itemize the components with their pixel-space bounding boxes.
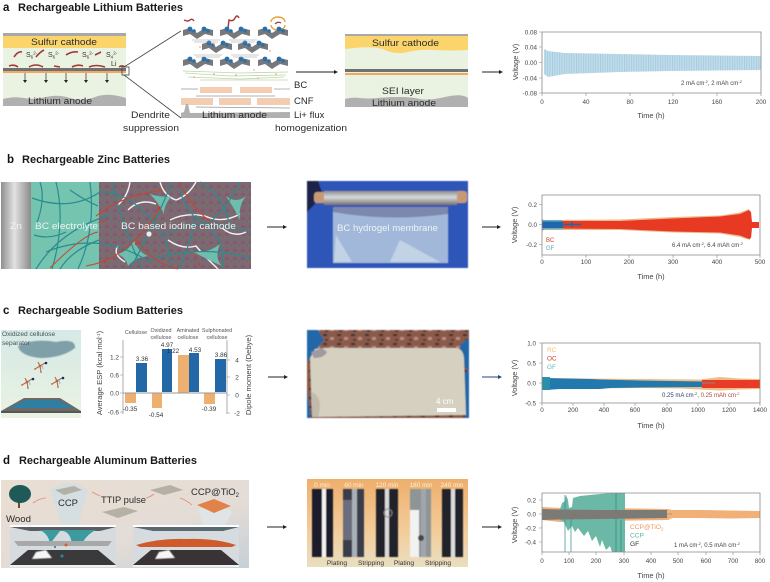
chart d <box>510 493 766 580</box>
arrow a1 <box>296 70 338 74</box>
bar chart: ESP and dipole moment: -0.6 <box>108 410 119 416</box>
diagram: dendrite cell: 2- <box>33 50 38 56</box>
chart d: Voltage (V) <box>510 507 519 543</box>
arrow d1 <box>267 525 287 529</box>
bar chart: ESP and dipole moment: cellulose <box>207 335 227 341</box>
scene right <box>133 525 239 567</box>
chart c: 0.0 <box>527 380 536 388</box>
photo series: plating and stripping: 60 min <box>344 482 364 489</box>
chart b: 0.2 <box>528 202 537 209</box>
chart a: , 2 mAh cm <box>708 81 738 87</box>
bar chart: ESP and dipole moment <box>95 328 253 419</box>
label: dendrite suppression: suppression <box>123 123 179 134</box>
diagram: dendrite cell: Sulfur cathode <box>31 37 97 48</box>
chart a: 0.04 <box>525 44 537 52</box>
panel: c rechargeable sodium batteries <box>1 305 767 430</box>
chart b: 400 <box>712 259 723 266</box>
chart a: 0.00 <box>525 60 537 67</box>
photo series: plating and stripping: Plating <box>327 560 347 567</box>
bar chart: ESP and dipole moment: 1.22 <box>167 348 180 355</box>
panel: b rechargeable zinc batteries <box>1 154 766 281</box>
diagram: wood CCP TiO2 process: Wood <box>6 514 31 525</box>
chart d: 500 <box>673 558 684 565</box>
arrow d2 <box>482 525 502 529</box>
bar chart: ESP and dipole moment: Average ESP (kcal mol <box>95 337 104 415</box>
bar chart: ESP and dipole moment: -2 <box>234 410 240 418</box>
chart d: -0.2 <box>525 526 536 532</box>
bar chart: ESP and dipole moment: -0.39 <box>202 406 217 413</box>
diagram: zinc iodine cell: Zn <box>10 221 22 232</box>
diagram: stabilised cell: Sulfur cathode <box>372 38 439 49</box>
chart a: 160 <box>712 99 723 106</box>
label c: c <box>3 305 10 317</box>
diagram: stabilised cell: SEI layer <box>382 86 424 97</box>
chart d: -0.4 <box>525 540 536 546</box>
label b: b <box>7 154 14 166</box>
bar chart: ESP and dipole moment: Cellulose <box>125 330 147 336</box>
chart a: Voltage (V) <box>511 44 520 80</box>
chart c: Voltage (V) <box>510 360 519 396</box>
bar chart: ESP and dipole moment: 3.86 <box>215 352 228 359</box>
diagram: BC CNF layered separator: Lithium anode <box>202 110 267 121</box>
chart d: CCP@TiO <box>630 524 661 531</box>
bar chart: ESP and dipole moment: 4.97 <box>161 342 174 349</box>
bar chart: ESP and dipole moment: cellulose <box>151 335 171 341</box>
diagram: wood CCP TiO2 process: CCP@TiO <box>191 487 236 498</box>
chart d: 800 <box>755 558 766 565</box>
label d: d <box>3 455 10 467</box>
chart b: -2 <box>700 241 705 246</box>
chart c: -2 <box>736 391 740 396</box>
diagram: wood CCP TiO2 process: TTIP pulse <box>101 495 146 506</box>
diagram: stabilised cell <box>345 34 468 109</box>
chart c: Time (h) <box>637 421 665 430</box>
bar chart: ESP and dipole moment: cellulose <box>178 335 198 341</box>
chart c: 600 <box>630 407 641 414</box>
diagram: stabilised cell: Lithium anode <box>372 98 436 109</box>
chart c: 1200 <box>722 407 736 414</box>
chart b: 300 <box>668 259 679 266</box>
bar chart: ESP and dipole moment: -0.35 <box>123 406 138 413</box>
diagram: dendrite cell: Lithium anode <box>28 96 92 107</box>
chart c: -2 <box>694 391 698 396</box>
diagram: dendrite cell: Li <box>111 61 117 68</box>
chart a: -0.08 <box>523 90 537 98</box>
diagram: wood CCP TiO2 process <box>1 480 249 568</box>
bar chart: ESP and dipole moment: 2 <box>235 374 239 382</box>
diagram: dendrite cell: 6 <box>53 54 56 60</box>
chart d: CCP <box>630 532 645 540</box>
diagram: dendrite cell: S <box>82 52 87 59</box>
diagram: wood CCP TiO2 process: CCP <box>58 498 78 509</box>
chart a <box>511 30 767 120</box>
photo series: plating and stripping: 0 min <box>314 482 330 489</box>
chart b: , 6.4 mAh cm <box>704 243 739 249</box>
label: dendrite suppression <box>123 110 179 134</box>
chart c: , <box>697 393 701 399</box>
chart d: 2 <box>661 526 664 532</box>
chart a: -2 <box>738 79 743 84</box>
chart b: 0 <box>540 259 544 266</box>
chart b: Time (h) <box>637 272 665 281</box>
diagram: dendrite cell: S <box>48 52 53 59</box>
chart d: 300 <box>619 558 630 565</box>
diagram: dendrite cell: 2- <box>89 50 94 56</box>
chart d: 100 <box>564 558 575 565</box>
diagram: dendrite cell: S <box>26 52 31 59</box>
chart a: -2 <box>704 79 709 84</box>
chart a: 2 mA cm <box>681 81 704 87</box>
chart a: 40 <box>582 99 590 106</box>
heading c: Rechargeable Sodium Batteries <box>18 305 183 317</box>
chart a: 200 <box>756 99 767 106</box>
labels: separator layers: homogenization <box>275 123 347 134</box>
chart d: 0.0 <box>527 512 536 518</box>
diagram: dendrite cell: 6 <box>31 54 34 60</box>
bar chart: ESP and dipole moment: 3.36 <box>136 356 149 363</box>
bar chart: ESP and dipole moment: -0.54 <box>149 412 164 419</box>
chart b: 6.4 mA cm <box>672 243 700 249</box>
chart b: Voltage (V) <box>510 207 519 243</box>
chart c: 0.5 <box>527 360 536 368</box>
chart c: 1.0 <box>527 340 536 348</box>
chart c: 800 <box>662 407 673 414</box>
diagram: dendrite cell: 6 <box>87 54 90 60</box>
heading d: Rechargeable Aluminum Batteries <box>19 455 197 467</box>
photo series: plating and stripping: Stripping <box>425 560 451 567</box>
photo: BC hydrogel membrane <box>307 181 468 268</box>
chart a: 0.08 <box>525 30 537 36</box>
labels: separator layers <box>275 80 347 134</box>
photo series: plating and stripping: 120 min <box>376 482 399 489</box>
chart d: -2 <box>697 541 702 546</box>
zoom indicator <box>122 31 181 118</box>
diagram: zinc iodine cell <box>1 182 251 269</box>
chart c: 1400 <box>753 407 767 414</box>
chart c: RC <box>547 347 557 354</box>
chart a: 0 <box>540 99 544 106</box>
diagram: wood CCP TiO2 process: 2 <box>236 493 240 499</box>
chart c <box>510 340 767 430</box>
chart b: BC <box>546 238 555 244</box>
diagram: zinc iodine cell: BC based iodine cathode <box>121 221 236 232</box>
scene left <box>10 525 116 567</box>
chart b: 200 <box>624 259 635 266</box>
chart a: 120 <box>668 99 679 106</box>
chart d: 600 <box>701 558 712 565</box>
chart b: -2 <box>739 241 744 246</box>
labels: separator layers: BC <box>294 80 307 91</box>
chart a: -0.04 <box>523 76 537 82</box>
bar chart: ESP and dipole moment: 0 <box>235 392 239 400</box>
bar chart: ESP and dipole moment: Aminated <box>177 328 199 334</box>
diagram: dendrite cell: 2- <box>113 50 118 56</box>
bar chart: ESP and dipole moment: 0.6 <box>110 372 119 380</box>
chart b: 100 <box>581 259 592 266</box>
bar chart: ESP and dipole moment: ) <box>95 330 104 333</box>
photo series: plating and stripping: Plating <box>394 560 414 567</box>
chart d: , 0.5 mAh cm <box>701 543 736 549</box>
arrow c1 <box>268 375 288 379</box>
chart d: Time (h) <box>637 571 665 580</box>
chart b: 500 <box>755 259 766 266</box>
bar chart: ESP and dipole moment: 4.53 <box>189 347 202 354</box>
labels: separator layers: CNF <box>294 96 314 107</box>
diagram: oxidized cellulose separator: separator <box>2 340 31 347</box>
bar chart: ESP and dipole moment: 0.0 <box>110 390 119 398</box>
photo: cellulose membrane: 4 cm <box>436 397 454 406</box>
chart c: GF <box>547 364 556 371</box>
arrow c2 <box>482 375 502 379</box>
chart b: -0.2 <box>526 242 537 249</box>
chart a: Time (h) <box>637 111 665 120</box>
arrow b1 <box>267 225 287 229</box>
arrow b2 <box>482 225 501 229</box>
chart c: 0.25 mA cm <box>662 393 694 399</box>
photo series: plating and stripping: 180 min <box>410 482 433 489</box>
arrow a2 <box>482 70 503 74</box>
heading b: Rechargeable Zinc Batteries <box>22 154 170 166</box>
bar chart: ESP and dipole moment: Oxidized <box>151 328 171 334</box>
bar chart: ESP and dipole moment: -1 <box>96 333 101 337</box>
chart c: -0.5 <box>525 400 536 408</box>
photo series: plating and stripping: 240 min <box>441 482 464 489</box>
chart b: GF <box>546 246 555 252</box>
photo: cellulose membrane <box>307 330 469 418</box>
chart d: -2 <box>736 541 741 546</box>
bar chart: ESP and dipole moment: Sulphonated <box>202 328 232 334</box>
bar chart: ESP and dipole moment: 4 <box>235 358 239 364</box>
diagram: zinc iodine cell: BC electrolyte <box>35 221 98 232</box>
heading a: Rechargeable Lithium Batteries <box>18 2 183 14</box>
chart d: 200 <box>591 558 602 565</box>
chart b: 0.0 <box>528 222 537 229</box>
chart c: 0.25 mAh cm <box>701 393 736 399</box>
chart d: 1 mA cm <box>674 543 697 549</box>
diagram: BC CNF layered separator <box>181 16 290 121</box>
diagram: dendrite cell: 4 <box>111 54 114 60</box>
photo series: plating and stripping: Stripping <box>358 560 384 567</box>
panel: d rechargeable aluminum batteries <box>1 455 766 580</box>
icon: tree <box>9 485 31 508</box>
bar chart: ESP and dipole moment: 1.2 <box>110 354 119 362</box>
chart d: GF <box>630 541 639 548</box>
chart c: 0 <box>540 407 544 414</box>
chart c: 400 <box>599 407 610 414</box>
chart c: 200 <box>568 407 579 414</box>
chart d: 0.2 <box>527 498 536 504</box>
chart c: 1000 <box>691 407 705 414</box>
diagram: dendrite cell <box>3 33 126 107</box>
chart d: 0 <box>540 558 544 565</box>
photo: BC hydrogel membrane: BC hydrogel membrane <box>337 223 438 234</box>
chart a: 80 <box>626 99 634 106</box>
diagram: zinc iodine cell: Zn²⁺ <box>98 219 108 225</box>
labels: separator layers: Li+ flux <box>294 110 325 121</box>
diagram: oxidized cellulose separator <box>1 330 81 418</box>
chart c: OC <box>547 356 557 362</box>
chart d: 400 <box>646 558 657 565</box>
diagram: dendrite cell: S <box>106 52 111 59</box>
diagram: dendrite cell: 2- <box>55 50 60 56</box>
bar chart: ESP and dipole moment: Dipole moment (Debye) <box>244 334 253 415</box>
panel: a rechargeable lithium batteries <box>3 2 767 134</box>
label: dendrite suppression: Dendrite <box>131 110 170 121</box>
label a: a <box>3 2 10 14</box>
diagram: oxidized cellulose separator: Oxidized cellulose <box>2 331 55 338</box>
chart d: 700 <box>728 558 739 565</box>
chart b <box>510 195 766 281</box>
photo series: plating and stripping <box>307 479 468 567</box>
